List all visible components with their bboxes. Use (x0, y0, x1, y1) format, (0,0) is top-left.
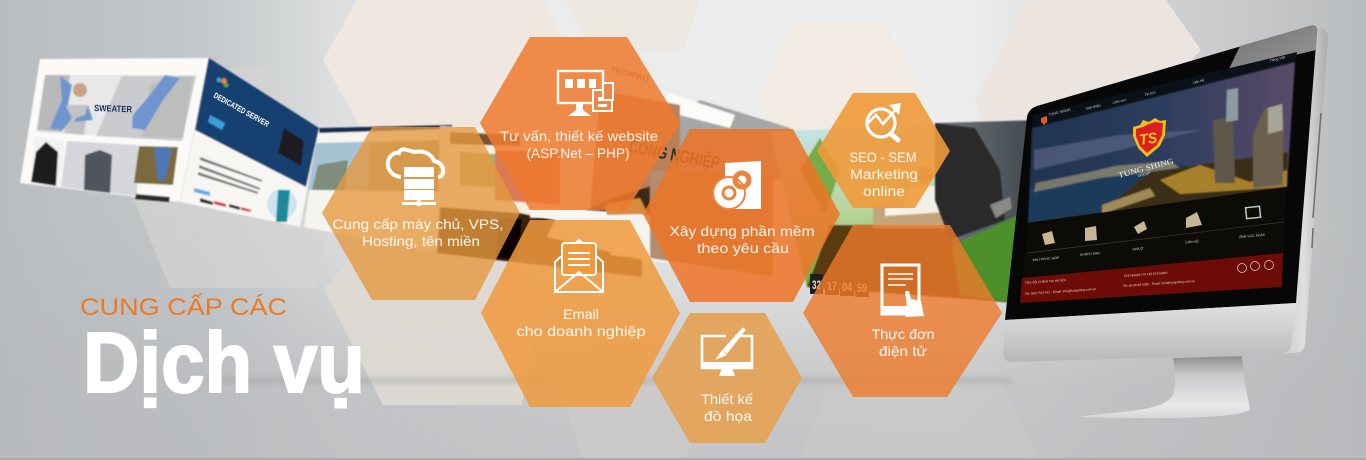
screen: navigation: TUNG SHING (1048, 108, 1071, 117)
timer: 59 (857, 281, 867, 295)
techpro logo: TECHPRO (610, 65, 650, 83)
label: online (863, 184, 905, 199)
screen: navigation (1032, 52, 1297, 128)
hexagon: graphic design (652, 313, 802, 443)
chin (1003, 303, 1296, 362)
label: Thiết kế (701, 392, 753, 407)
screen: navigation: Liên hệ (1192, 78, 1205, 85)
screen: navigation: Giới thiệu (1085, 103, 1101, 111)
website screenshot: pan and storm (935, 120, 1040, 302)
label: (ASP.Net – PHP) (526, 146, 630, 161)
website screenshot: dedicated server (180, 58, 319, 227)
screen: navigation: Tiếng Việt (1269, 55, 1286, 63)
label: điện tử (879, 344, 927, 359)
website screenshot: real estate (304, 125, 452, 255)
techpro headline: CÔNG NGHIỆP (627, 135, 722, 173)
label: Hosting, tên miền (362, 234, 480, 249)
screen: dark service band: KHÁCH SẠN (1080, 251, 1100, 257)
label: Tư vấn, thiết kế website (500, 129, 658, 144)
website screenshot: sweater shop (20, 26, 209, 202)
hexagon: website design (480, 37, 680, 210)
screen: skyline (1028, 62, 1295, 223)
screen: logo shield: TUNG SHING (1117, 156, 1175, 180)
timer (810, 274, 869, 297)
label: Xây dựng phần mềm (670, 224, 814, 239)
icon: devices (558, 71, 613, 116)
screen: dark service band: CĂN HỘ (1185, 238, 1199, 245)
website screenshot: food (437, 126, 642, 277)
icon: monitor and brush (702, 328, 752, 376)
website screenshot: techpro (530, 63, 790, 277)
subtitle: CUNG CẤP CÁC (80, 293, 287, 321)
server headline: DEDICATED SERVER (212, 91, 271, 129)
icon: envelope (555, 240, 603, 292)
icon: disc and gears (713, 161, 761, 209)
gloss (1228, 25, 1317, 71)
screen: red footer (1020, 253, 1283, 303)
label: Email (563, 307, 599, 322)
imac monitor (1003, 25, 1328, 418)
screen: red footer: CHI NHÁNH TP HỒ CHÍ MINH (1124, 270, 1168, 278)
bezel (1005, 25, 1317, 320)
website screenshot: vegetable farm (770, 121, 1020, 302)
screen: red footer: Tel: 08 39 96 5355 · Email: info@tungshing.com.vn (1123, 279, 1195, 288)
hexagon: email (481, 220, 680, 407)
label: Thực đơn (872, 327, 934, 342)
hexagon: e-menu (803, 225, 1002, 397)
body edge (1280, 26, 1328, 354)
label: đồ họa (704, 409, 753, 424)
stand (1078, 356, 1250, 418)
label: SEO - SEM (850, 150, 916, 165)
screen: navigation: Lĩnh vực (1112, 98, 1127, 105)
screen: red footer: TRỤ SỞ CHÍNH TẠI HÀ NỘI (1025, 277, 1066, 285)
main title: Dịch vụ (83, 316, 365, 411)
hexagon: software (643, 129, 840, 302)
screen: dark service band: NHÀ Ở (1132, 246, 1144, 251)
screen: dark service band: KHU PHỨC HỢP (1032, 255, 1060, 262)
screen: dark service band: LĨNH VỰC KHÁC (1238, 232, 1266, 239)
timer: 17 (827, 279, 837, 293)
screen: logo shield (1117, 118, 1175, 180)
right side ports (1312, 113, 1321, 248)
timer: 32 (812, 278, 821, 292)
screen: dark service band (1022, 187, 1287, 278)
icon: tablet touch (882, 265, 924, 317)
sweater headline: SWEATER (94, 103, 133, 114)
label: Cung cấp máy chủ, VPS, (332, 217, 504, 232)
label: Marketing (850, 167, 918, 182)
icon: cloud server (388, 149, 443, 206)
screen: logo shield: TS (1138, 130, 1158, 149)
screen: red footer: Tel: 0437 534 512 · Email: info@tungshing.com.vn (1025, 287, 1096, 296)
timer: 04 (842, 280, 852, 294)
label: cho doanh nghiệp (516, 324, 646, 339)
label: theo yêu cầu (697, 241, 789, 256)
title (80, 293, 365, 411)
hexagon: seo (817, 93, 950, 208)
screen: logo shield: GROUP (1137, 171, 1152, 178)
hexagon: hosting (322, 127, 520, 300)
screen: navigation: Tin tức (1144, 90, 1156, 97)
icon: magnifier chart (866, 103, 901, 140)
